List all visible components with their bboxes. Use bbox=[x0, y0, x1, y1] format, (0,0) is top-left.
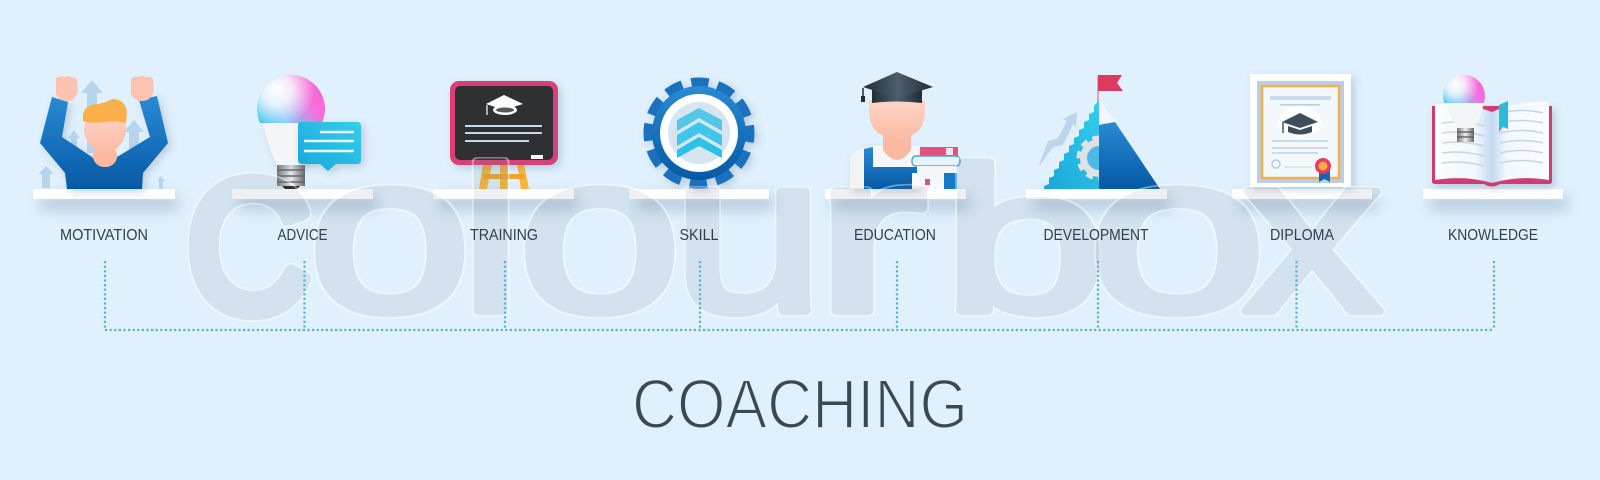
watermark: Colourbox: o bbox=[518, 107, 681, 359]
icon: graduation cap bbox=[861, 72, 933, 103]
icon: motivation person bbox=[39, 76, 168, 189]
dotted connector lines bbox=[105, 261, 1494, 330]
watermark: Colourbox bbox=[187, 106, 1382, 360]
icon: education student bbox=[850, 72, 960, 189]
icon: advice bulb with chat bubble bbox=[257, 75, 361, 189]
icon: knowledge open book with bulb bbox=[1432, 75, 1552, 186]
title: COACHING bbox=[632, 365, 968, 443]
icon: stepped slope bbox=[1044, 100, 1099, 189]
icon: small gear bbox=[1076, 136, 1099, 180]
watermark: Colourbox: l bbox=[461, 126, 520, 355]
watermark: Colourbox: C bbox=[187, 142, 311, 351]
icon: skill gear bbox=[649, 83, 749, 183]
label: motivation: MOTIVATION bbox=[60, 227, 148, 244]
watermark: Colourbox: o bbox=[1088, 107, 1266, 359]
icon: training chalkboard bbox=[450, 81, 558, 189]
watermark: Colourbox: o bbox=[308, 107, 471, 359]
icon: diploma certificate bbox=[1250, 74, 1351, 187]
label: skill: SKILL bbox=[680, 227, 719, 244]
watermark: Colourbox: x bbox=[1243, 107, 1382, 359]
icon: chevrons bbox=[677, 108, 722, 158]
icon: development mountain bbox=[1039, 75, 1160, 189]
icon: bulb on book bbox=[1443, 75, 1485, 142]
label: education: EDUCATION bbox=[854, 227, 936, 244]
label: knowledge: KNOWLEDGE bbox=[1448, 227, 1538, 244]
icon: board graduation cap bbox=[486, 95, 523, 115]
icon: chat bubble bbox=[298, 122, 361, 171]
icon: diploma graduation cap bbox=[1282, 113, 1318, 134]
watermark: Colourbox: u bbox=[673, 106, 824, 359]
watermark: Colourbox: b bbox=[943, 125, 1106, 355]
label: advice: ADVICE bbox=[278, 227, 328, 244]
shelves bbox=[33, 189, 1568, 210]
icon: blue peak bbox=[1099, 122, 1160, 189]
icon: stack of books bbox=[912, 147, 960, 189]
icon: ribbon seal bbox=[1315, 158, 1331, 182]
label: training: TRAINING bbox=[470, 227, 538, 244]
icon: background arrows bbox=[39, 80, 165, 189]
label: diploma: DIPLOMA bbox=[1270, 227, 1335, 244]
label: development: DEVELOPMENT bbox=[1044, 227, 1149, 244]
watermark: Colourbox: r bbox=[814, 107, 927, 360]
